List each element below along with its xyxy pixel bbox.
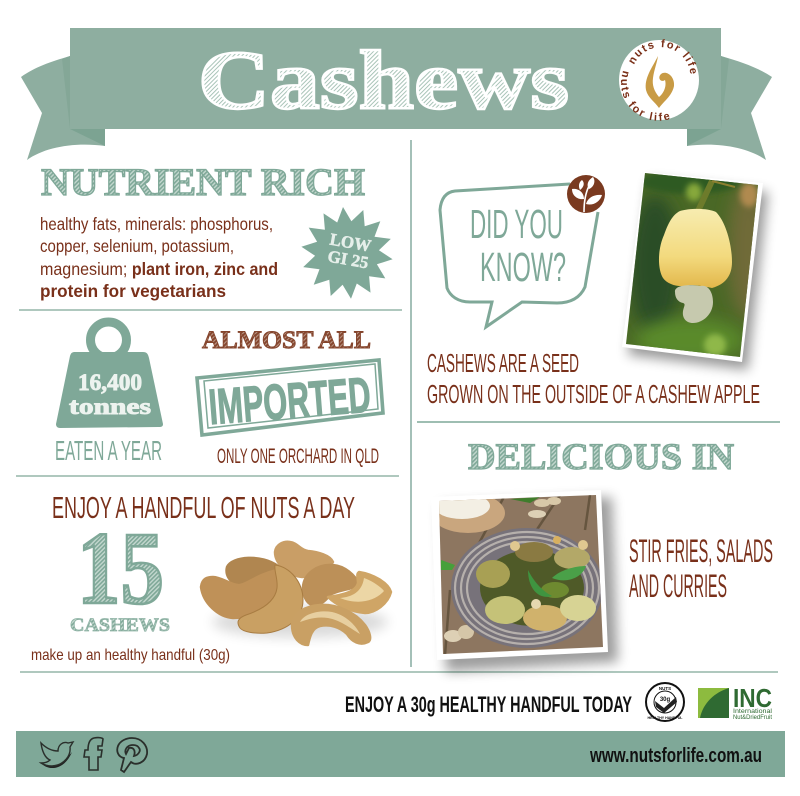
nuts for life logo: nuts for life (620, 71, 670, 121)
ribbon main band (70, 28, 721, 129)
caption: eaten a year: EATEN A YEAR (55, 435, 162, 466)
speech bubble (440, 184, 598, 327)
ribbon banner (21, 28, 772, 160)
tagline: ENJOY A 30g HEALTHY HANDFUL TODAY (345, 692, 632, 717)
heading: enjoy a handful: ENJOY A HANDFUL OF NUTS A DAY (52, 490, 355, 525)
icon: facebook (84, 738, 103, 770)
column divider (410, 140, 412, 667)
nuts for life logo (619, 39, 699, 121)
panel: delicious in (431, 437, 773, 672)
INC logo: International (733, 708, 773, 715)
footer strip (345, 683, 773, 721)
icon: healthy handful badge: HEALTHY HANDFUL (647, 716, 683, 720)
nutrient text block (40, 214, 278, 301)
INC logo: INC (733, 683, 772, 713)
nutrient text block: healthy fats, minerals: phosphorus, (40, 214, 273, 234)
panel: imported (197, 327, 383, 468)
icon: pinterest (117, 738, 147, 772)
bubble text: KNOW? (480, 244, 566, 290)
ribbon left tail (21, 56, 105, 160)
heading: nutrient rich: NUTRIENT RICH (41, 161, 365, 204)
cashew nuts image (201, 542, 391, 645)
big number 15: 15 (77, 511, 164, 626)
icon: twitter (41, 742, 73, 768)
ribbon right tail (687, 56, 772, 160)
weight amount: 16,400 (78, 370, 142, 395)
nutrient text block: magnesium; plant iron, zinc and (40, 259, 278, 279)
imported stamp: IMPORTED (207, 367, 373, 435)
fact text (427, 348, 760, 409)
imported stamp (197, 360, 383, 435)
low GI starburst badge (301, 207, 393, 299)
panel: did you know (427, 165, 770, 409)
bottom bar (16, 731, 785, 777)
nuts for life logo: nuts for life (629, 39, 696, 74)
icon: healthy handful badge (646, 683, 684, 721)
INC logo (698, 683, 773, 721)
nutrient text block: protein for vegetarians (40, 281, 226, 301)
low GI starburst badge: LOW (328, 230, 373, 256)
photo: salad dish (431, 490, 618, 672)
icon: healthy handful badge: NUTS (659, 686, 671, 691)
caption: only one orchard: ONLY ONE ORCHARD IN QLD (217, 445, 379, 468)
heading: almost all: ALMOST ALL (202, 327, 371, 354)
title: Cashews (198, 34, 569, 127)
icon: healthy handful badge: 30g (660, 697, 671, 703)
panel: tonnes eaten (55, 322, 163, 466)
icon: weight (56, 322, 163, 428)
panel: handful (31, 490, 391, 664)
serving ideas text (629, 533, 773, 604)
photo: cashew apple (615, 165, 770, 370)
fact text: CASHEWS ARE A SEED (427, 348, 579, 378)
icon: weight: tonnes (69, 394, 151, 419)
low GI starburst badge: GI 25 (326, 247, 370, 272)
panel: nutrient rich (40, 161, 393, 301)
bubble text (470, 201, 566, 290)
bubble text: DID YOU (470, 201, 563, 247)
nutrient text block: copper, selenium, potassium, (40, 236, 234, 256)
handful caption: make up an healthy handful (30g) (31, 647, 230, 664)
label: cashews: CASHEWS (70, 615, 170, 636)
INC logo: Nut&DriedFruit (733, 714, 772, 721)
heading: delicious in: DELICIOUS IN (468, 437, 734, 478)
icon: leaf badge (567, 175, 605, 213)
